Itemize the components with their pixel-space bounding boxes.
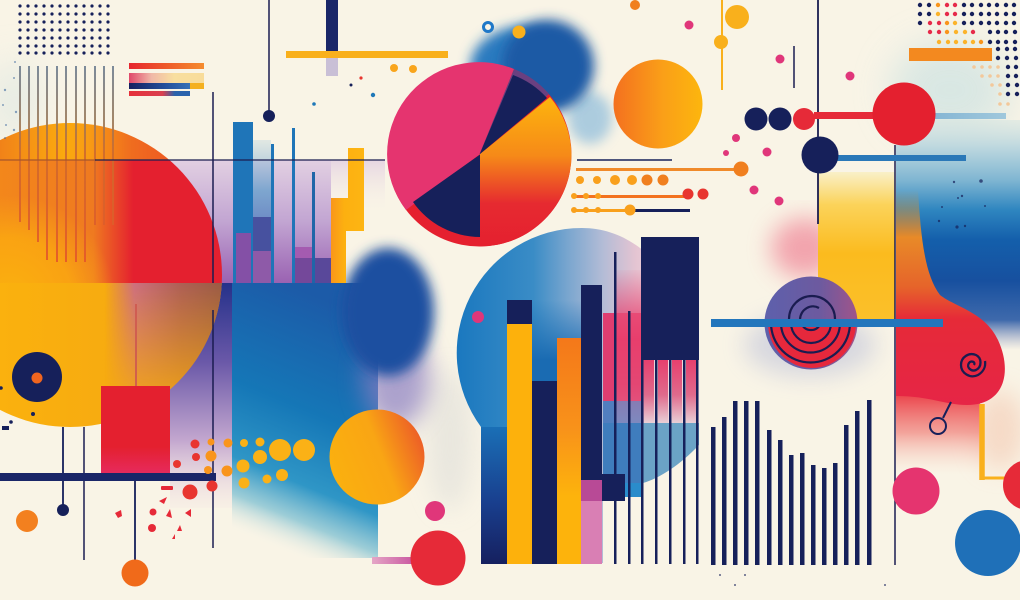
chart: pie [387, 62, 572, 247]
panel: right yellow block [818, 172, 895, 320]
panel: big blue keyhole form [457, 228, 699, 564]
icon: stripe stack [129, 63, 204, 96]
icon: pin [930, 402, 951, 434]
blue ink blob over block [342, 248, 434, 428]
purple haze under navy strip [170, 283, 232, 508]
panel: large split circle [0, 120, 225, 429]
panel: purple haze behind bars [170, 160, 385, 283]
bottom red ball [372, 501, 466, 586]
icon: dot grid top left [18, 4, 110, 55]
line with yellow beads top right [714, 0, 749, 90]
red square [101, 304, 170, 473]
red confetti [115, 486, 191, 539]
small dots near top bar [263, 0, 694, 122]
panel: salmon fade below red shape [896, 390, 980, 475]
right edge circles [892, 460, 1020, 576]
slider lines beside pie [571, 160, 748, 216]
top right dot grid [909, 3, 1019, 106]
icon: spiral on red shape [961, 354, 985, 376]
top yellow bar with navy stem [286, 0, 448, 76]
scattered pink dots [723, 54, 854, 206]
scattered orange and yellow dots [173, 438, 315, 500]
yellow elbow rod [982, 404, 1006, 480]
icon: purple target with red rings [711, 276, 943, 370]
chart: central bars [507, 237, 699, 564]
speckles top left [2, 61, 17, 139]
chart: thin bar series [711, 400, 872, 565]
vertical lines over circle [20, 66, 113, 262]
colored dots rows [918, 3, 1019, 106]
orange bar [909, 48, 992, 61]
panel: blue gradient block [232, 283, 378, 558]
gradient orange circle [330, 410, 424, 504]
pink haze beside yellow panel [771, 218, 839, 278]
speckle marks [719, 179, 986, 586]
pink marker dot [472, 311, 484, 323]
panel: right red shape [896, 190, 1005, 405]
left target [0, 352, 62, 430]
chart: top left bars [233, 122, 364, 283]
panel: right blue field [896, 120, 1020, 350]
beads and red ball top right [744, 82, 1006, 174]
navy baseline with pins [0, 427, 216, 586]
orange sphere [614, 60, 702, 148]
